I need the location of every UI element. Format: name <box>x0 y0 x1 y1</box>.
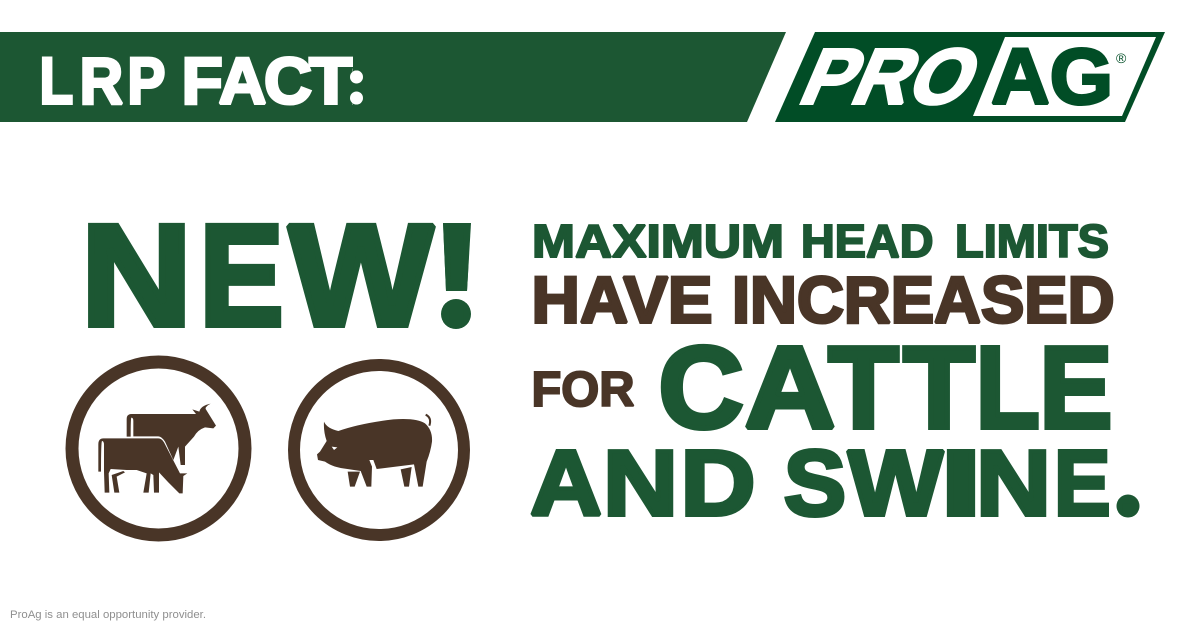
line: cattle: L <box>976 322 1040 452</box>
headline: NEW!: ! <box>432 195 480 356</box>
logo word: AG: AG <box>991 32 1113 120</box>
line: and swine: N <box>976 431 1051 535</box>
logo: ProAg <box>775 32 1165 122</box>
headline: NEW!: W <box>289 195 433 356</box>
line: maximum head limits: HEAD <box>801 215 934 267</box>
banner heading: P <box>127 44 164 118</box>
icon: swine <box>294 365 464 535</box>
line: have increased: HAVE <box>532 264 712 336</box>
line: and swine <box>530 448 1140 518</box>
pig eye <box>332 447 337 450</box>
banner heading: L <box>40 44 73 118</box>
line: maximum head limits: LIMITS <box>955 215 1109 267</box>
headline: NEW! <box>88 222 471 329</box>
line: cattle: T <box>903 322 975 452</box>
line: and swine: A <box>530 431 602 535</box>
headline: NEW!: E <box>200 195 284 356</box>
line: and swine: W <box>848 431 943 535</box>
line: and swine: I <box>940 431 982 535</box>
headline: NEW!: N <box>81 195 192 356</box>
banner heading: : <box>349 44 364 118</box>
footer disclaimer: ProAg is an equal opportunity provider. <box>10 609 206 621</box>
line: cattle: C <box>658 322 744 452</box>
banner heading: T <box>309 44 353 118</box>
banner heading: A <box>218 44 266 118</box>
line: and swine: E <box>1054 431 1110 535</box>
line: and swine: N <box>603 431 678 535</box>
line: for: FOR <box>532 362 634 417</box>
line: cattle: A <box>744 322 836 452</box>
line: cattle: E <box>1040 322 1112 452</box>
icon: cattle <box>72 362 245 535</box>
line: cattle: T <box>828 322 899 452</box>
line: have increased: INCREASED <box>732 264 1114 336</box>
logo registered mark: ® <box>1116 50 1127 66</box>
line: and swine: . <box>1114 431 1142 535</box>
header banner <box>0 32 786 122</box>
line: and swine: S <box>784 431 846 535</box>
banner heading: R <box>80 44 123 118</box>
line: maximum head limits: MAXIMUM <box>532 215 784 267</box>
logo word: PRO: PRO <box>789 34 994 121</box>
line: and swine: D <box>680 431 756 535</box>
banner heading: F <box>182 44 223 118</box>
banner heading: C <box>264 44 312 118</box>
message text block <box>530 215 1142 535</box>
